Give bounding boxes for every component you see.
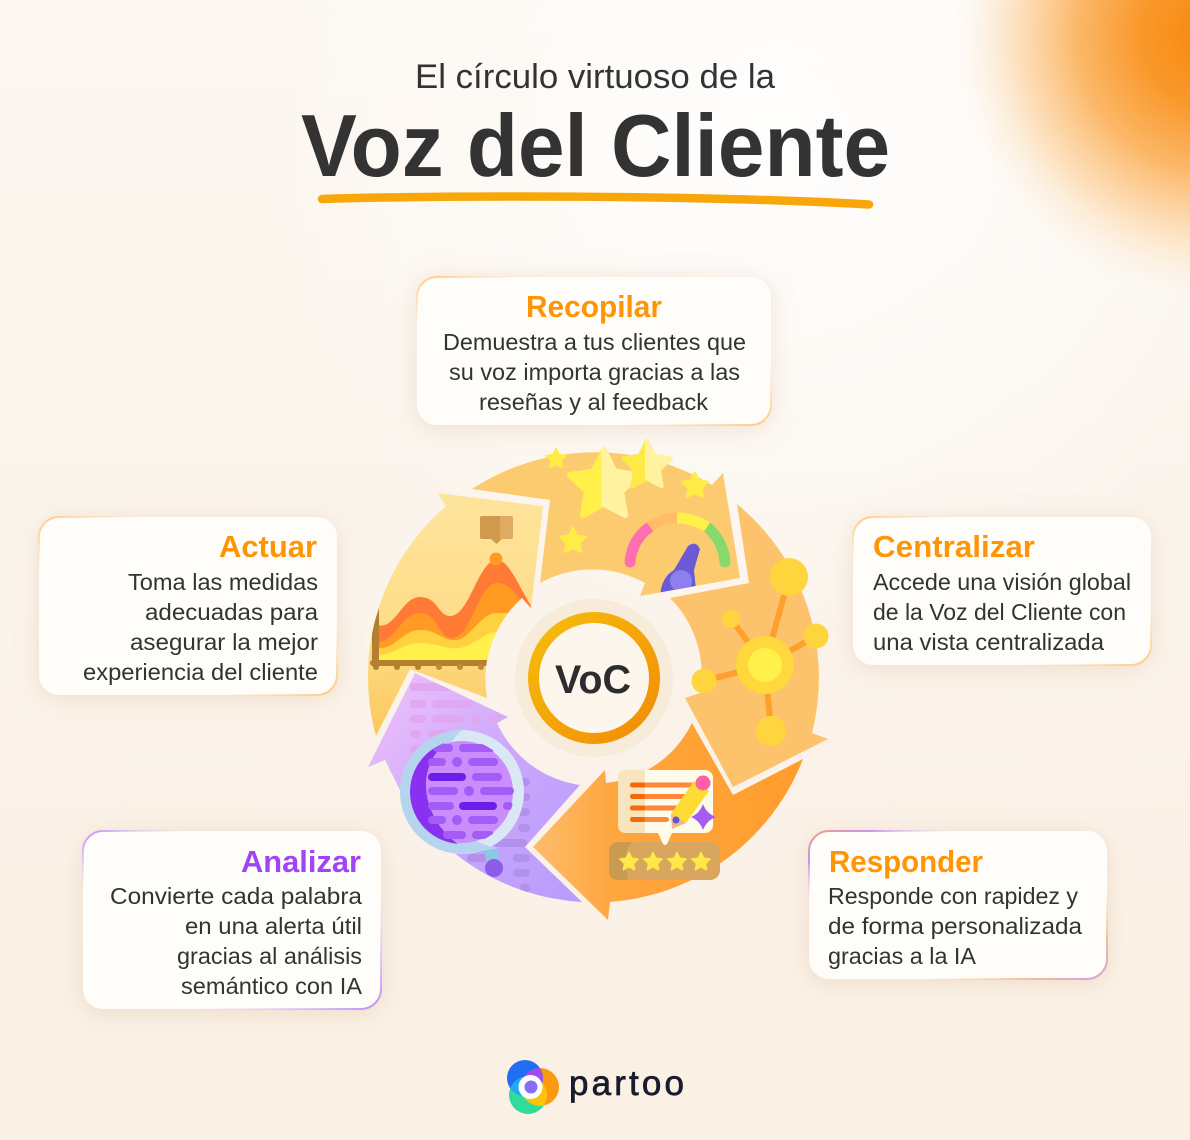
text: Analizar description	[110, 883, 363, 999]
decorative sun glow	[953, 0, 1190, 297]
text: Analizar description: en una alerta útil	[185, 913, 362, 939]
main heading: Voz del Cliente	[301, 96, 890, 195]
icon: sparkle	[691, 804, 716, 830]
text: Recopilar description	[443, 329, 746, 415]
text: Analizar description: semántico con IA	[181, 973, 363, 999]
arrow: Analizar segment	[368, 673, 582, 902]
text: Responder description: gracias a la IA	[828, 943, 977, 969]
title	[301, 58, 890, 204]
centre VoC badge: VoC	[555, 658, 631, 702]
arrow: Centralizar segment	[670, 504, 828, 787]
heading: Recopilar: Recopilar	[526, 289, 662, 324]
text: Recopilar description: Demuestra a tus clientes que	[443, 329, 746, 355]
centre VoC badge	[515, 599, 673, 757]
text: Responder description	[828, 883, 1082, 969]
icon: partoo mark	[507, 1060, 559, 1114]
icon: area chart	[370, 552, 535, 670]
icon: network hub	[692, 558, 828, 746]
text: Centralizar description: una vista centralizada	[873, 629, 1104, 655]
subtitle line: El círculo virtuoso de la	[415, 58, 775, 96]
arrow: Actuar segment	[368, 493, 543, 736]
heading: Actuar: Actuar	[219, 529, 317, 564]
heading: Analizar: Analizar	[241, 844, 361, 879]
icon: gauge	[630, 518, 725, 600]
text: Actuar description: Toma las medidas	[128, 569, 318, 595]
arrow: Responder segment	[533, 723, 803, 920]
title underline	[322, 196, 869, 204]
text: Actuar description: experiencia del cliente	[83, 659, 318, 685]
panel: Analizar	[83, 831, 381, 1009]
text: Centralizar description	[873, 569, 1131, 655]
text: Analizar description: Convierte cada palabra	[110, 883, 362, 909]
panel: Recopilar	[417, 277, 771, 425]
icon: rating stars	[546, 441, 708, 552]
circular diagram	[368, 441, 828, 920]
text: Centralizar description: de la Voz del Cliente con	[873, 599, 1126, 625]
arrow: Recopilar segment	[472, 441, 740, 600]
heading: Centralizar: Centralizar	[873, 529, 1035, 564]
wordmark: partoo	[569, 1064, 684, 1103]
text: Recopilar description: reseñas y al feedback	[479, 389, 709, 415]
panel: Actuar	[39, 517, 337, 695]
icon: pencil	[671, 776, 710, 829]
text: Centralizar description: Accede una visión global	[873, 569, 1131, 595]
text: Actuar description	[83, 569, 318, 685]
logo: partoo	[507, 1060, 684, 1114]
text: Analizar description: gracias al análisis	[177, 943, 362, 969]
text: Actuar description: asegurar la mejor	[130, 629, 318, 655]
text: Recopilar description: su voz importa gracias a las	[449, 359, 740, 385]
icon: map pin flag	[480, 516, 513, 544]
heading: Responder: Responder	[829, 844, 983, 879]
text: Responder description: Responde con rapidez y	[828, 883, 1078, 909]
icon: magnifying glass	[400, 730, 524, 877]
text: Actuar description: adecuadas para	[145, 599, 318, 625]
panel: Responder	[809, 831, 1107, 979]
panel: Centralizar	[853, 517, 1151, 665]
icon: review bubble	[609, 770, 720, 880]
text: Responder description: de forma personalizada	[828, 913, 1082, 939]
